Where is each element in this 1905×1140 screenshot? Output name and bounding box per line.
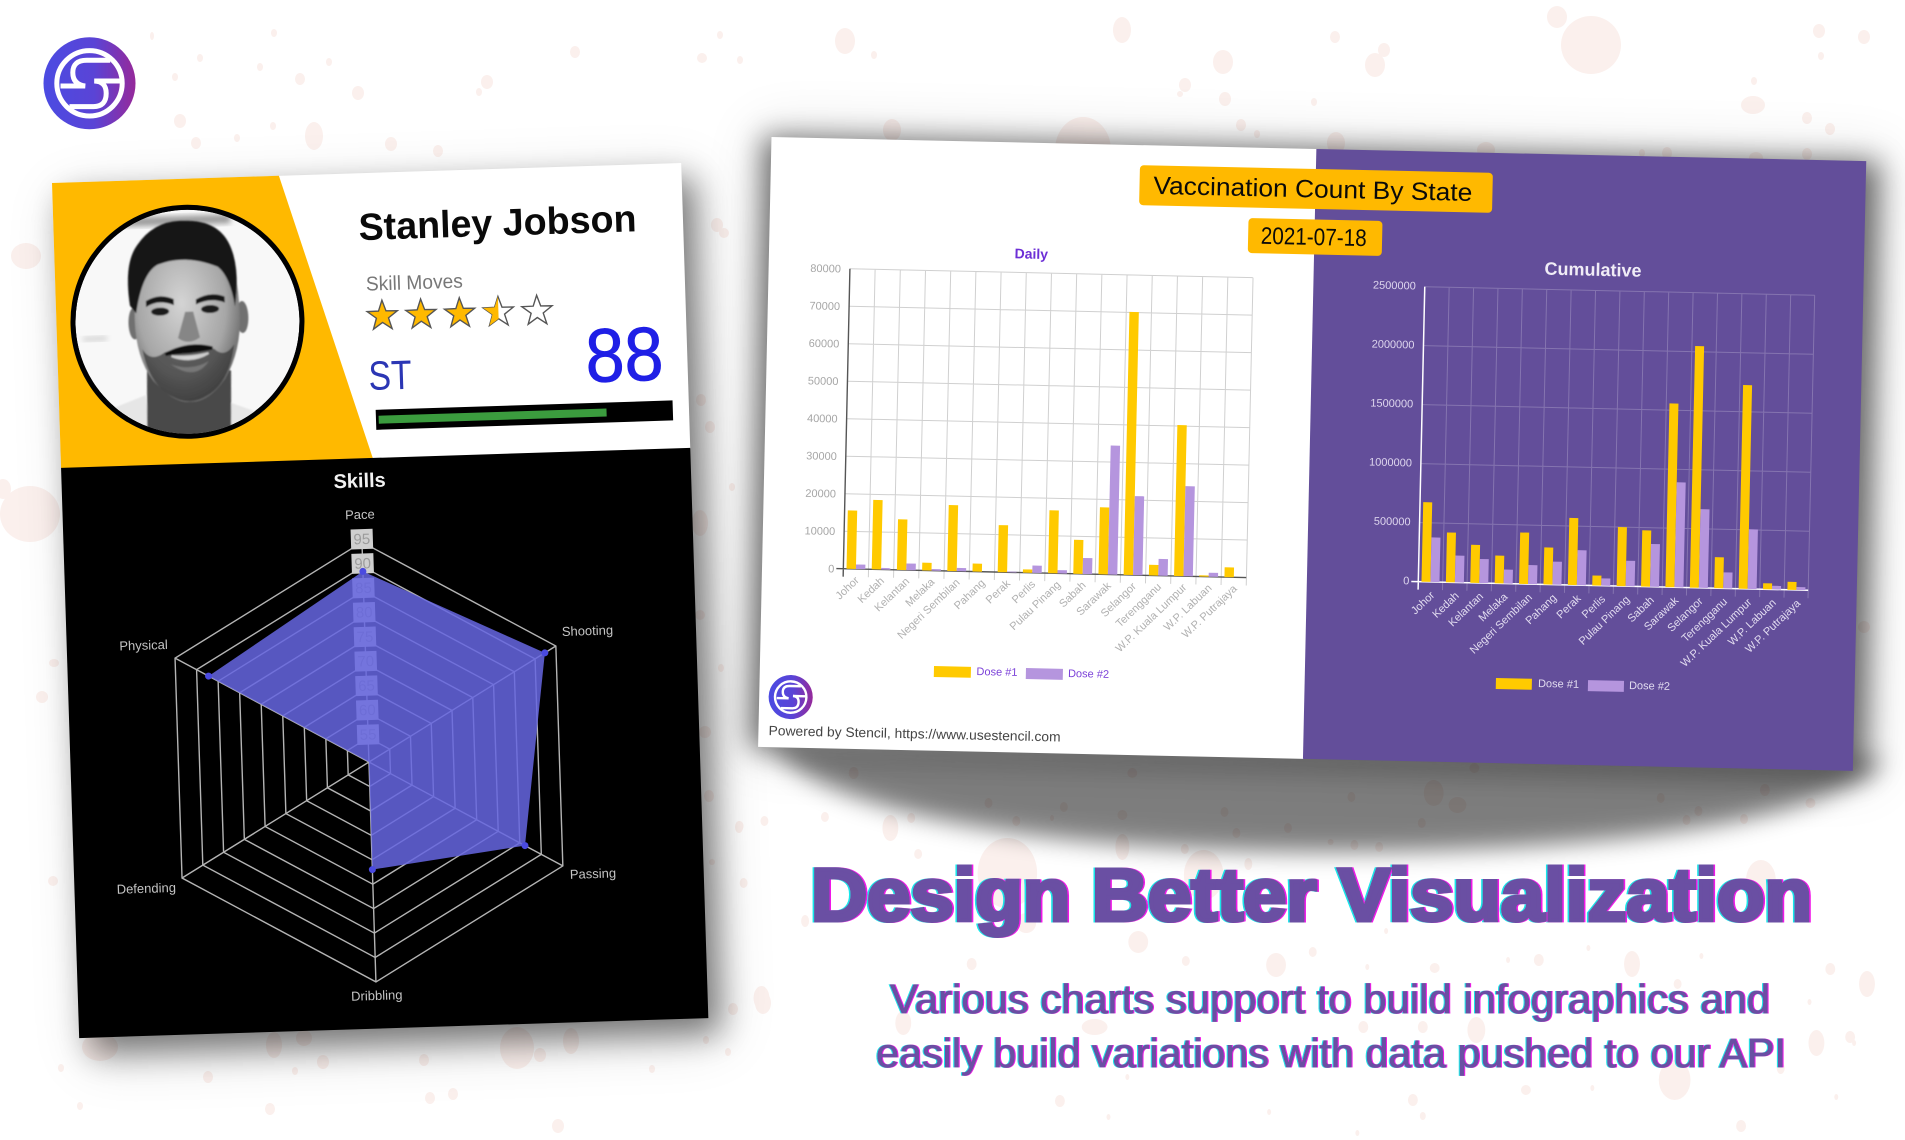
chart: daily bars [802, 263, 1253, 658]
card shadow [58, 172, 726, 1062]
chart: cumulative bars: 2000000 [1372, 339, 1415, 351]
chart: cumulative bars: 1500000 [1370, 398, 1413, 410]
rating bar [376, 400, 673, 430]
chart: cumulative bars: Kedah [1430, 590, 1462, 621]
chart: cumulative bars: Pahang [1524, 592, 1559, 627]
chart: daily bars: 70000 [809, 300, 840, 313]
chart: cumulative bars: Perak [1555, 592, 1584, 621]
chart: cumulative bars: Pulau Pinang [1577, 594, 1632, 648]
subtitle [876, 976, 1786, 1076]
daily legend: Dose #1 [976, 666, 1018, 679]
position label: ST [368, 352, 412, 399]
daily legend [934, 665, 1109, 681]
banner title [1139, 165, 1493, 213]
chart: daily bars: 50000 [808, 375, 839, 388]
chart: daily bars: Sarawak [1074, 580, 1114, 618]
chart: daily bars: 80000 [810, 263, 841, 276]
chart: cumulative bars: Terengganu [1680, 596, 1730, 645]
radar axis labels: Pace [345, 507, 375, 522]
chart: cumulative bars: Melaka [1477, 591, 1511, 624]
daily heading: Daily [1014, 245, 1048, 262]
chart: daily bars: Johor [834, 574, 862, 602]
chart: cumulative bars: 500000 [1374, 516, 1411, 528]
chart: daily bars: Perlis [1010, 578, 1038, 606]
card header white [52, 163, 690, 469]
cumulative legend: Dose #2 [1629, 680, 1670, 693]
chart: daily bars: Sabah [1057, 580, 1088, 610]
chart: daily bars: Perak [984, 578, 1013, 606]
chart: daily bars: 60000 [809, 338, 839, 351]
chart: daily bars: Pahang [952, 577, 988, 612]
overall rating: 88 [584, 312, 665, 399]
radar chart: 60 [359, 702, 376, 719]
shadow under visualization card [743, 127, 1891, 852]
banner date: 2021-07-18 [1260, 223, 1367, 252]
main title: Design Better Visualization [811, 854, 1812, 936]
chart: daily bars: Selangor [1099, 580, 1139, 620]
cumulative legend: Dose #1 [1538, 678, 1579, 691]
player name: Stanley Jobson [358, 198, 637, 249]
chart: cumulative bars: W.P. Putrajaya [1743, 597, 1804, 656]
chart: daily bars: Negeri Sembilan [895, 577, 963, 642]
chart: daily bars: W.P. Kuala Lumpur [1114, 582, 1189, 655]
radar chart: 65 [358, 678, 375, 695]
subtitle: easily build variations with data pushed to our API [876, 1030, 1786, 1076]
radar axis labels [105, 499, 625, 1011]
chart: daily bars: W.P. Labuan [1162, 582, 1214, 634]
skill moves label: Skill Moves [366, 271, 463, 296]
player photo [67, 201, 308, 442]
radar axis labels: Dribbling [351, 987, 403, 1004]
logo: Stencil top left [44, 37, 136, 129]
player card [52, 162, 726, 1063]
chart: cumulative bars: Sarawak [1642, 595, 1682, 633]
vaccination card [758, 137, 1866, 771]
radar axis labels: Physical [119, 637, 168, 653]
chart: daily bars: Pulau Pinang [1008, 579, 1063, 633]
radar axis labels: Shooting [562, 622, 613, 639]
chart: cumulative bars: 1000000 [1369, 457, 1412, 469]
logo: small Stencil [768, 674, 813, 720]
chart: daily bars: W.P. Putrajaya [1180, 582, 1240, 641]
chart: daily bars: 10000 [804, 525, 835, 538]
radar chart: 75 [356, 629, 374, 646]
chart: daily bars: 0 [828, 563, 834, 575]
yellow wedge [52, 173, 373, 468]
panel: skills black [61, 448, 708, 1038]
radar axis labels: Passing [570, 865, 616, 882]
daily legend: Dose #2 [1068, 668, 1109, 681]
cumulative legend [1496, 677, 1670, 693]
skills heading: Skills [333, 470, 386, 493]
chart: daily bars: Melaka [903, 576, 938, 609]
chart: cumulative bars: Negeri Sembilan [1468, 592, 1535, 657]
chart: cumulative bars [1365, 280, 1815, 672]
chart: cumulative bars: Sabah [1626, 594, 1657, 625]
cumulative heading: Cumulative [1544, 259, 1642, 281]
banner title: Vaccination Count By State [1153, 172, 1473, 207]
chart: cumulative bars: Perlis [1580, 593, 1608, 621]
subtitle: Various charts support to build infographics and [890, 976, 1770, 1022]
skill stars [367, 295, 553, 329]
chart: cumulative bars: 2500000 [1373, 280, 1416, 293]
chart: daily bars: Terengganu [1114, 581, 1164, 630]
panel: daily white [758, 137, 1317, 759]
chart: daily bars: Kelantan [872, 576, 912, 614]
chart: cumulative bars: 0 [1403, 575, 1409, 587]
chart: daily bars: 20000 [805, 488, 836, 501]
chart: cumulative bars: W.P. Labuan [1726, 597, 1779, 648]
chart: cumulative bars: Selangor [1665, 595, 1706, 635]
radar chart: 55 [359, 726, 377, 744]
chart: cumulative bars: Johor [1409, 589, 1437, 617]
radar chart: 85 [355, 580, 372, 597]
chart: cumulative bars: W.P. Kuala Lumpur [1679, 596, 1755, 670]
radar chart [171, 523, 566, 988]
radar chart: 80 [356, 604, 373, 622]
radar axis labels: Defending [116, 880, 176, 897]
powered by credit: Powered by Stencil, https://www.usestencil.com [768, 723, 1061, 744]
radar chart: 95 [353, 531, 370, 548]
panel: cumulative purple [1303, 149, 1866, 771]
radar chart: 70 [357, 653, 374, 671]
chart: daily bars: Kedah [856, 575, 887, 606]
chart: cumulative bars: Kelantan [1446, 591, 1486, 629]
chart: daily bars: 40000 [807, 413, 838, 426]
chart: daily bars: 30000 [806, 450, 837, 463]
radar chart: 90 [354, 555, 371, 573]
